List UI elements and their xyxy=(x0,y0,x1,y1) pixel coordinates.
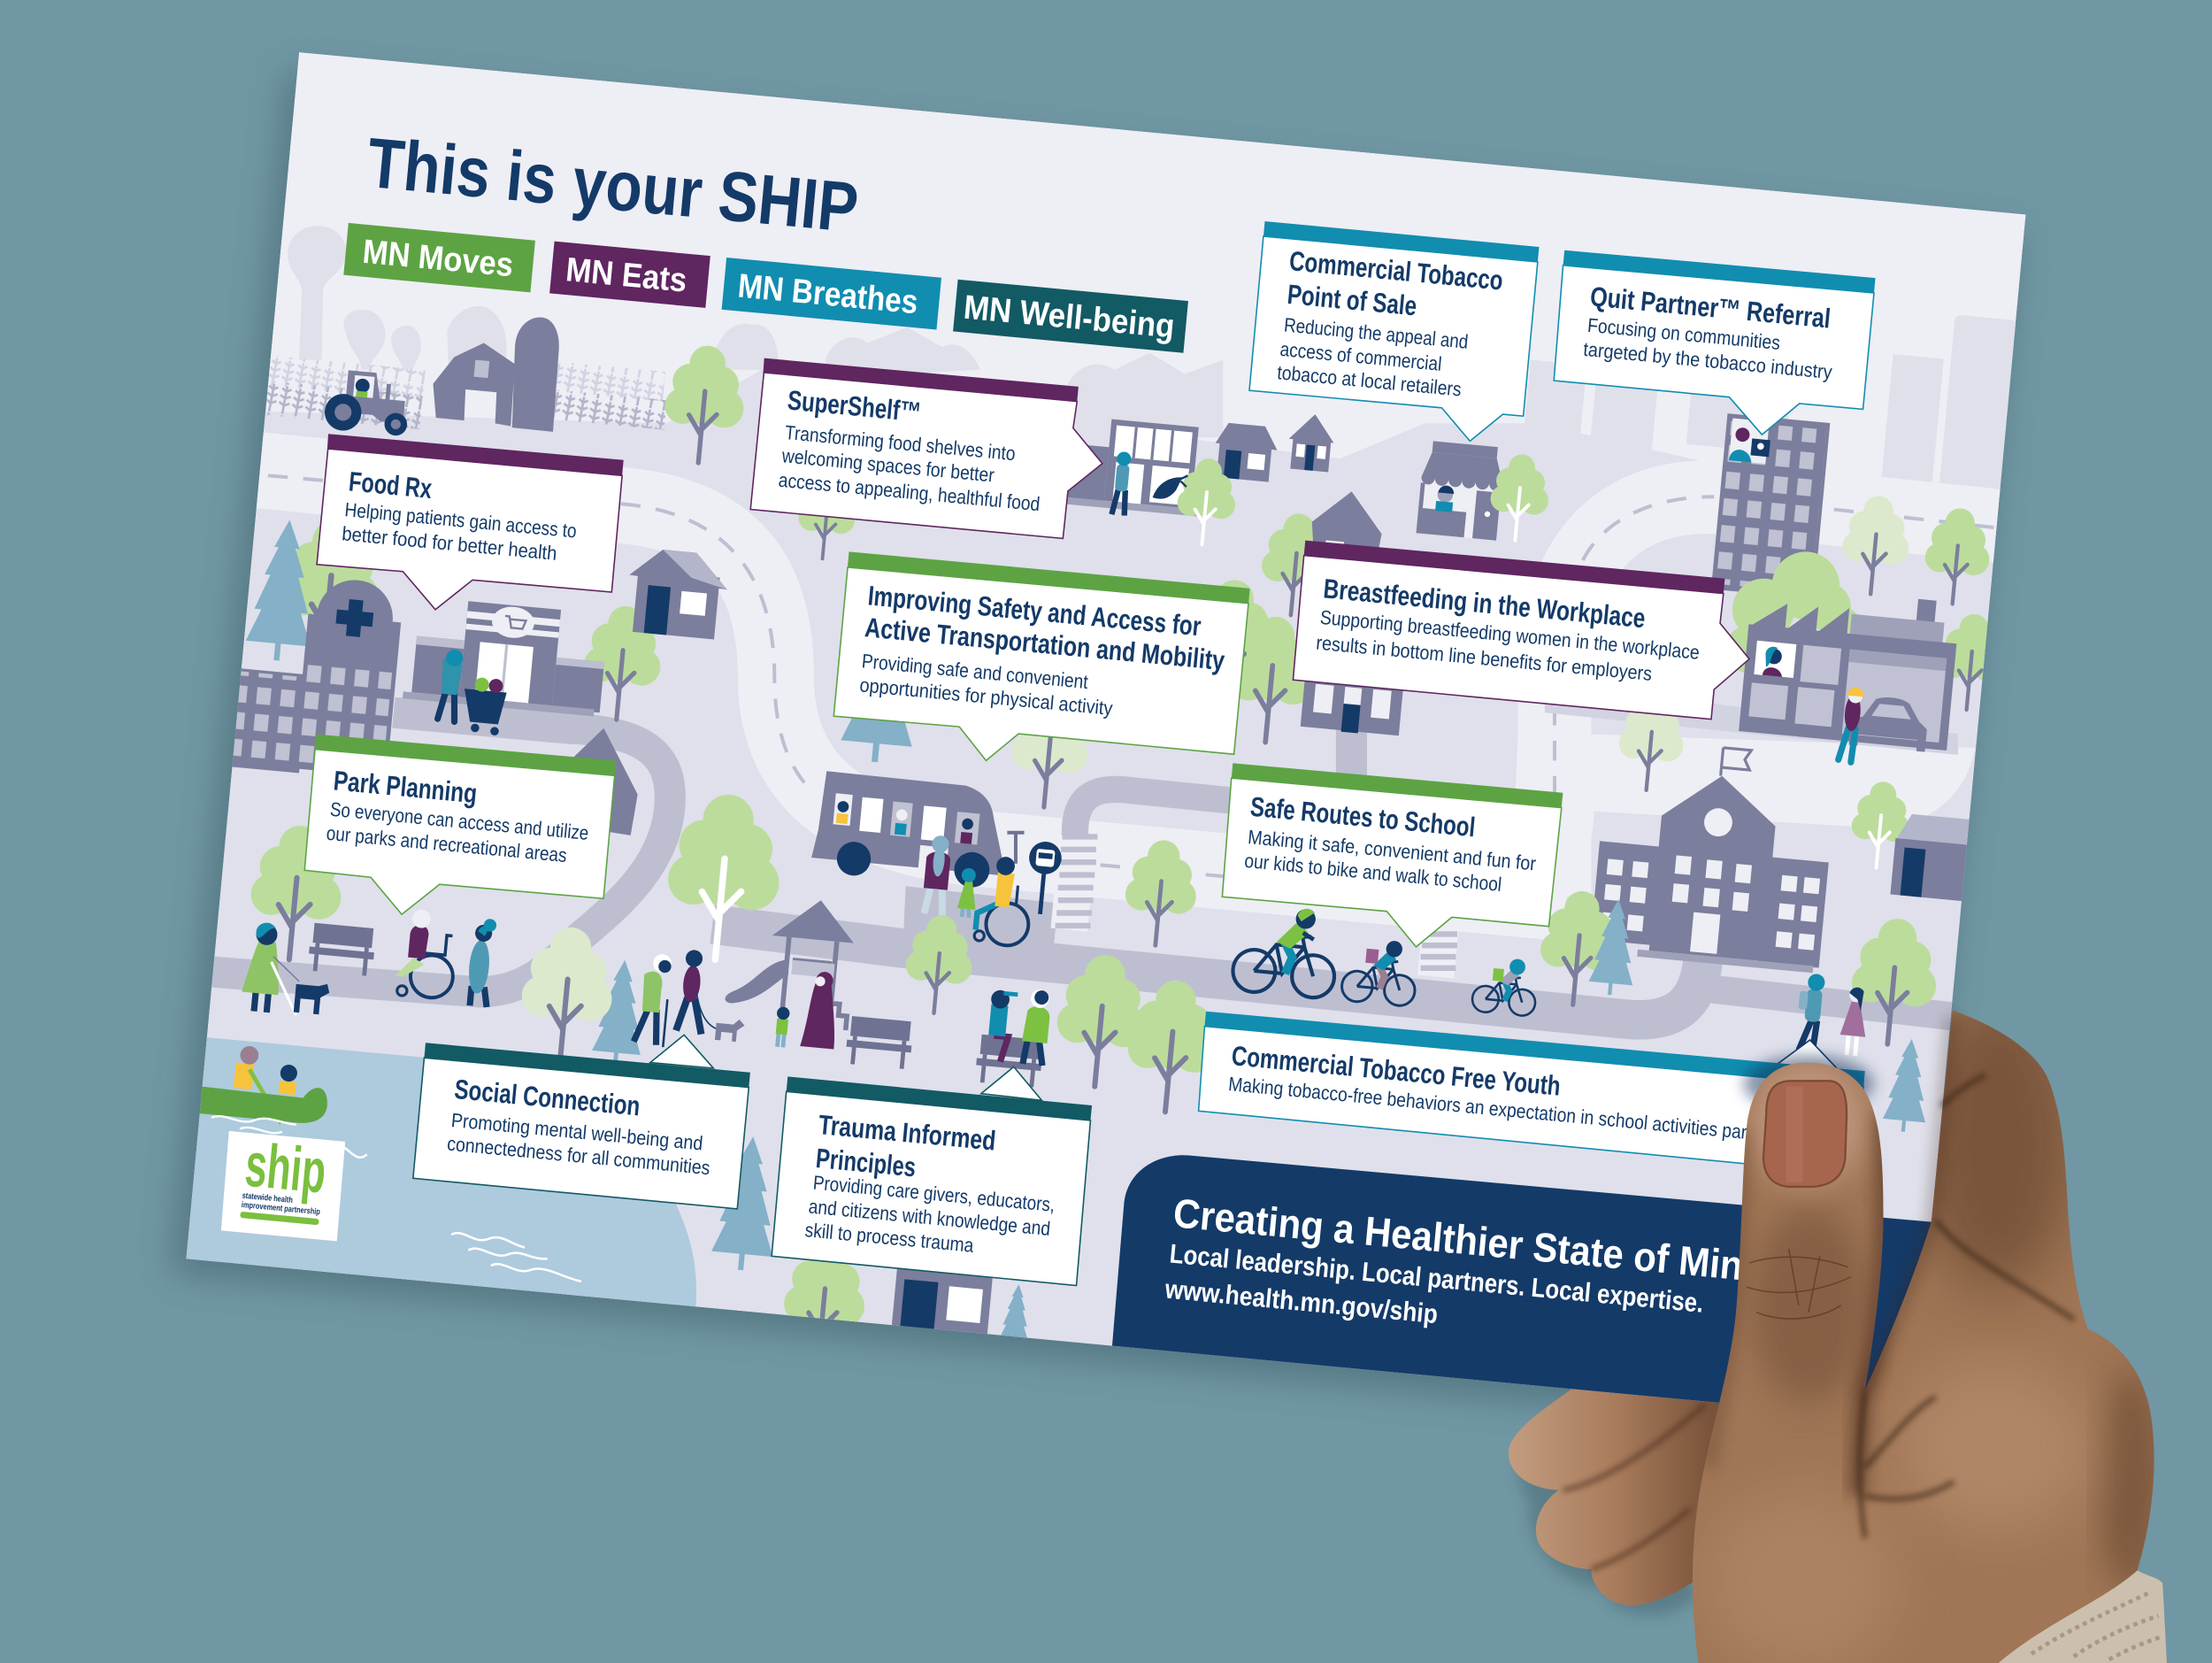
hospital xyxy=(218,569,404,781)
logo: ship: ship xyxy=(242,1129,329,1206)
body xyxy=(326,798,589,866)
palm edge shadow xyxy=(1865,1016,1953,1390)
footer tagline: Local leadership. Local partners. Local expertise. xyxy=(1168,1239,1705,1319)
factory xyxy=(1739,583,1961,751)
ground xyxy=(169,370,2032,1425)
logo: ship xyxy=(221,1129,345,1241)
farm fields xyxy=(265,356,667,430)
walking path to store and park xyxy=(197,712,670,992)
panel: Park Planning xyxy=(304,735,616,914)
panel: Improving Safety xyxy=(833,551,1250,760)
body: Transforming food shelves into xyxy=(784,421,1017,465)
body: access to appealing, healthful food xyxy=(778,469,1041,515)
tobacco kiosk xyxy=(1417,440,1506,541)
heading: Active Transportation and Mobility xyxy=(864,612,1226,676)
hardhat worker xyxy=(1839,687,1865,763)
tag: MN Eats xyxy=(549,242,710,308)
person: wheelchair user xyxy=(393,908,459,1000)
heading: Breastfeeding in the Workplace xyxy=(1322,573,1647,634)
heading: Improving Safety and Access for xyxy=(866,580,1202,642)
body: tobacco at local retailers xyxy=(1276,361,1463,401)
barn and silo xyxy=(433,317,559,432)
body: Promoting mental well-being and xyxy=(450,1109,703,1155)
city towers xyxy=(1591,386,1657,450)
tag: MN Well-being: MN Well-being xyxy=(962,289,1176,346)
house behind park planning xyxy=(569,728,638,835)
body: welcoming spaces for better xyxy=(780,444,995,487)
printed card xyxy=(169,52,2032,1425)
car xyxy=(1849,694,1930,752)
heading xyxy=(815,1109,997,1182)
trees behind buildings xyxy=(244,343,2008,964)
body: Making tobacco-free behaviors an expectation in school activities par xyxy=(1227,1073,1748,1143)
heading: Principles xyxy=(815,1143,918,1182)
factory forecourt xyxy=(1545,683,1958,755)
hand: fingers behind card xyxy=(1509,1383,1742,1605)
office tower xyxy=(1711,413,1830,598)
water tower silhouette xyxy=(288,226,346,360)
house near store xyxy=(624,547,730,640)
supershelf grocery xyxy=(1053,414,1207,517)
people: couple on bench xyxy=(986,985,1052,1066)
foreground trees xyxy=(516,452,1942,1366)
footer url: www.health.mn.gov/ship xyxy=(1163,1274,1439,1329)
school forecourt road xyxy=(1516,735,1975,897)
far tree silhouettes xyxy=(343,306,506,370)
far house silhouettes xyxy=(826,327,1223,437)
card shadow xyxy=(173,71,2017,1436)
house east xyxy=(1890,812,1982,902)
small houses xyxy=(1212,412,1336,482)
heading: Park Planning xyxy=(332,765,479,809)
body: and citizens with knowledge and xyxy=(808,1195,1051,1240)
panel: Breastfeeding in the Workplace xyxy=(1293,541,1749,720)
hand xyxy=(1693,995,2167,1663)
roads xyxy=(197,467,2032,1020)
body xyxy=(341,498,578,565)
thumbnail xyxy=(1763,1081,1847,1187)
tractor xyxy=(323,368,411,436)
panel: Social Connection xyxy=(413,1035,750,1209)
body: Supporting breastfeeding women in the workplace xyxy=(1319,606,1701,664)
category tags xyxy=(343,223,1188,353)
body xyxy=(859,650,1114,720)
skyline silhouettes xyxy=(288,226,2017,497)
heading: Food Rx xyxy=(348,466,434,504)
road dashes xyxy=(268,475,1996,876)
path from office xyxy=(1341,722,1361,797)
factory trees xyxy=(1725,551,1863,674)
body xyxy=(1276,313,1469,401)
heading: Commercial Tobacco xyxy=(1288,245,1504,296)
heading xyxy=(1286,245,1504,321)
heading: Commercial Tobacco Free Youth xyxy=(1230,1040,1562,1102)
body: our kids to bike and walk to school xyxy=(1243,850,1502,896)
body: So everyone can access and utilize xyxy=(329,798,589,844)
heading: Safe Routes to School xyxy=(1249,791,1477,843)
water xyxy=(176,1037,696,1313)
body: Helping patients gain access to xyxy=(344,498,578,543)
panel: Quit Partner Referral xyxy=(1554,250,1876,435)
main road xyxy=(226,467,1566,903)
panel: Food Rx xyxy=(317,434,624,610)
body: skill to process trauma xyxy=(804,1219,975,1257)
bike path xyxy=(712,924,1704,1020)
person: caregiver xyxy=(465,918,497,1007)
heading: SuperShelf™ xyxy=(787,385,923,427)
crosswalks xyxy=(1051,834,1458,978)
benches xyxy=(307,922,1044,1088)
person: wheelchair user at bus stop xyxy=(973,855,1034,947)
canoe with two people xyxy=(199,1045,327,1133)
body xyxy=(778,421,1041,515)
body: access of commercial xyxy=(1279,338,1443,375)
school xyxy=(1589,737,1839,974)
people: students walking xyxy=(1794,973,1870,1057)
office below breastfeeding xyxy=(1301,663,1405,737)
body xyxy=(446,1109,710,1179)
panel: Safe Routes to School xyxy=(1222,763,1563,947)
person: shopper at supershelf xyxy=(1111,451,1132,516)
heading: Point of Sale xyxy=(1286,279,1418,321)
bike rack xyxy=(1007,833,1025,864)
body: Providing care givers, educators, xyxy=(812,1172,1056,1216)
heading: Trauma Informed xyxy=(818,1109,997,1157)
icon: carrot xyxy=(1154,475,1187,497)
tag: MN Breathes: MN Breathes xyxy=(736,266,919,321)
body: Reducing the appeal and xyxy=(1283,313,1469,353)
body: targeted by the tobacco industry xyxy=(1582,338,1833,383)
body: our parks and recreational areas xyxy=(326,822,568,866)
bus stop plaza xyxy=(902,886,1058,974)
body: Focusing on communities xyxy=(1586,314,1781,354)
cyclists xyxy=(1231,903,1540,1017)
tag: MN Moves xyxy=(343,223,535,292)
tag: MN Eats: MN Eats xyxy=(565,250,688,300)
panel: Commercial Tobacco Point of Sale xyxy=(1249,221,1539,441)
body: Providing safe and convenient xyxy=(861,650,1089,693)
east path xyxy=(1700,988,1975,1019)
person: woman walking dog xyxy=(675,949,751,1043)
house at bottom xyxy=(891,1267,993,1346)
playground xyxy=(723,892,857,1030)
bus stop sign xyxy=(1024,840,1063,916)
house above breastfeeding xyxy=(1307,489,1386,585)
thumb knuckle wrinkles xyxy=(1747,1249,1851,1319)
body: results in bottom line benefits for employers xyxy=(1315,632,1653,685)
bus xyxy=(810,771,1013,890)
body xyxy=(1582,314,1833,383)
thumb shadow on card xyxy=(1744,1056,1873,1112)
heading: Social Connection xyxy=(453,1074,641,1122)
panel: Commercial Tobacco Free Youth xyxy=(1199,1012,1865,1174)
sweater cuff xyxy=(1998,1571,2167,1663)
people: parent and child at playground xyxy=(774,967,841,1052)
store with cart sign xyxy=(403,596,609,717)
skin shading xyxy=(1700,995,2162,1663)
heading: Quit Partner™ Referral xyxy=(1589,281,1832,335)
logo: ship: statewide health xyxy=(242,1191,293,1205)
north-east road xyxy=(1555,497,2032,896)
thumb fold creases xyxy=(1860,1075,2074,1538)
body xyxy=(804,1172,1056,1257)
title: This is your SHIP xyxy=(364,123,862,247)
person: visually impaired woman with guide dog xyxy=(240,921,335,1018)
person: shopper with cart xyxy=(436,649,511,736)
people: bus stop group xyxy=(921,835,982,918)
body: Making it safe, convenient and fun for xyxy=(1247,826,1538,874)
body: connectedness for all communities xyxy=(446,1133,710,1179)
body: opportunities for physical activity xyxy=(859,674,1114,720)
logo: ship: improvement partnership xyxy=(241,1200,320,1217)
panel: Trauma Informed Principles xyxy=(772,1066,1092,1285)
person: elder with cane xyxy=(634,952,672,1047)
tag: MN Moves: MN Moves xyxy=(361,233,515,284)
hand shadow xyxy=(1519,1411,1700,1615)
heading xyxy=(864,580,1226,676)
body: better food for better health xyxy=(341,522,558,565)
footer heading: Creating a Healthier State of Minnesota xyxy=(1171,1190,1864,1300)
water ripples xyxy=(339,1147,581,1282)
body xyxy=(1243,826,1538,896)
path right of bus xyxy=(1062,775,1230,835)
panel: SuperShelf xyxy=(750,358,1102,538)
navy footer band xyxy=(1111,1155,1932,1425)
